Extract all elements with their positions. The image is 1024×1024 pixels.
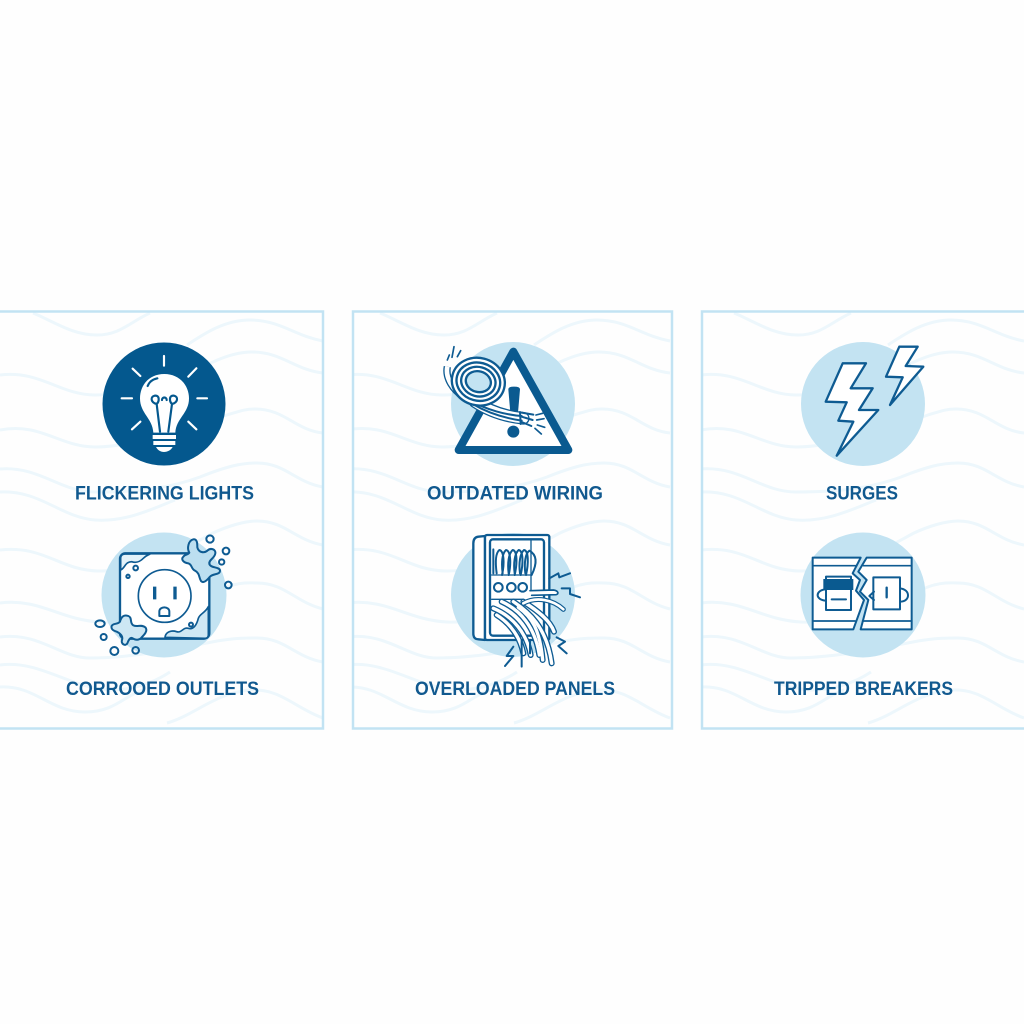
- label: surges: SURGES: [826, 484, 898, 504]
- label: outdated wiring: OUTDATED WIRING: [427, 484, 603, 504]
- label: tripped breakers: TRIPPED BREAKERS: [774, 679, 953, 700]
- icon: overloaded panel: [451, 533, 580, 667]
- label: flickering lights: FLICKERING LIGHTS: [75, 484, 254, 504]
- panel: middle column: [347, 312, 672, 728]
- icon: flickering light bulb: [102, 342, 226, 466]
- label: overloaded panels: OVERLOADED PANELS: [415, 679, 615, 700]
- panel: left column: [0, 312, 323, 728]
- icon: corroded outlet: [95, 532, 232, 658]
- panel: right column: [701, 312, 1024, 728]
- icon: power surge bolts: [801, 342, 925, 466]
- icon: outdated wiring warning: [446, 342, 575, 466]
- label: corroded outlets: CORROOED OUTLETS: [66, 679, 259, 700]
- icon: tripped breaker: [800, 532, 926, 658]
